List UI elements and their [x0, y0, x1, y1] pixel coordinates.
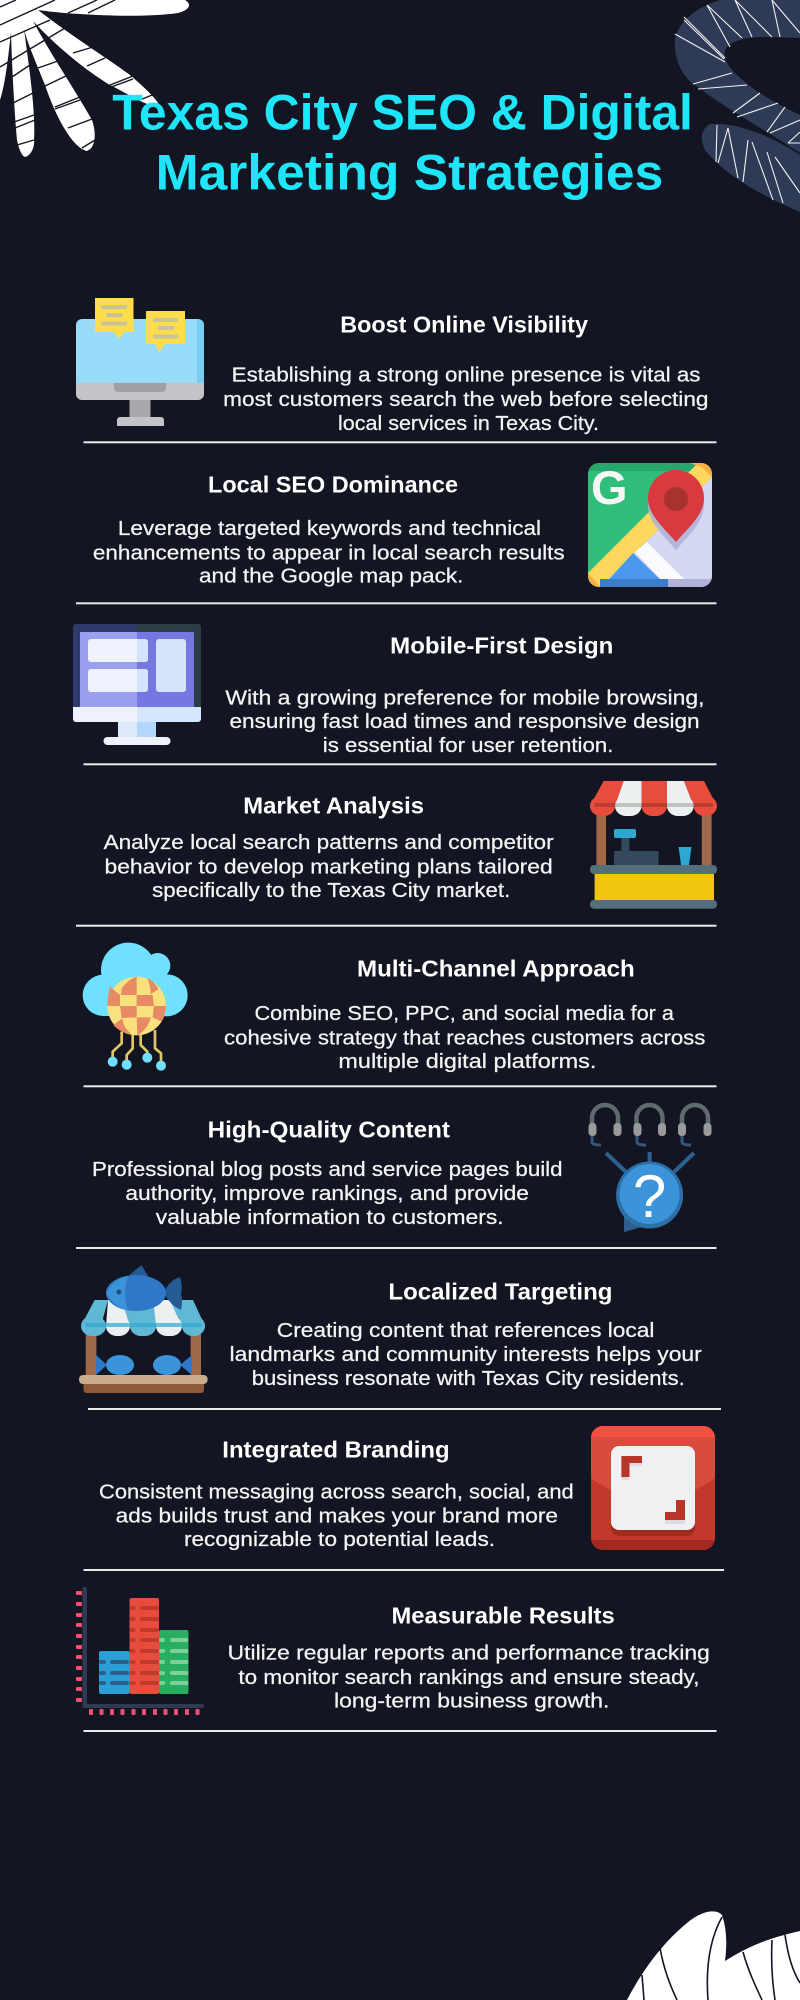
text block: Leverage targeted keywords and technical	[118, 518, 541, 540]
heading: Local SEO Dominance	[208, 471, 458, 497]
icon: headsets and question bubble	[588, 1105, 712, 1232]
text block: business resonate with Texas City residents.	[252, 1368, 685, 1390]
text block	[92, 1159, 562, 1229]
title: Texas City SEO & Digital	[112, 84, 693, 140]
text block: local services in Texas City.	[338, 413, 599, 435]
text block: valuable information to customers.	[156, 1207, 504, 1229]
text block: is essential for user retention.	[323, 735, 613, 757]
title: Marketing Strategies	[156, 144, 663, 200]
heading: Measurable Results	[392, 1603, 615, 1629]
text block: specifically to the Texas City market.	[152, 880, 510, 902]
panel: High-Quality Content	[92, 1105, 712, 1232]
heading: Boost Online Visibility	[340, 311, 588, 337]
heading: High-Quality Content	[208, 1116, 450, 1142]
decoration: navy leaf top right	[675, 0, 800, 212]
text block: multiple digital platforms.	[338, 1051, 596, 1073]
text block	[228, 1643, 710, 1713]
text block: Establishing a strong online presence is vital as	[232, 365, 700, 387]
text block	[93, 518, 565, 588]
text block: Consistent messaging across search, social, and	[99, 1481, 574, 1503]
icon: cloud and globe network	[83, 943, 188, 1071]
text block: to monitor search rankings and ensure steady,	[238, 1667, 700, 1689]
decoration: white leaf bottom right	[627, 1911, 800, 2000]
panel: Mobile-First Design	[73, 624, 704, 757]
text block	[230, 1320, 702, 1390]
panel: Multi-Channel Approach	[83, 943, 705, 1073]
text block: most customers search the web before selecting	[223, 389, 708, 411]
icon: market stall with cash register	[590, 781, 717, 909]
panel: Boost Online Visibility	[76, 298, 708, 435]
icon: red brand tile	[591, 1426, 715, 1550]
icon: purple desktop monitor	[73, 624, 201, 745]
text block: enhancements to appear in local search results	[93, 542, 565, 564]
panel: Integrated Branding	[100, 1426, 715, 1550]
text block: Utilize regular reports and performance tracking	[228, 1643, 710, 1665]
panel: Market Analysis	[104, 781, 717, 909]
heading: Integrated Branding	[222, 1436, 450, 1462]
heading: Localized Targeting	[388, 1279, 612, 1305]
text block: ads builds trust and makes your brand more	[116, 1505, 558, 1527]
text block: behavior to develop marketing plans tailored	[104, 856, 553, 878]
icon: bar chart	[76, 1587, 204, 1715]
title	[112, 84, 693, 200]
heading: Mobile-First Design	[390, 633, 613, 659]
text block: Combine SEO, PPC, and social media for a	[254, 1003, 675, 1025]
text block: Professional blog posts and service pages build	[92, 1159, 562, 1181]
text block: recognizable to potential leads.	[184, 1529, 495, 1551]
decoration: white leaf top left	[0, 0, 189, 157]
text block: and the Google map pack.	[199, 566, 463, 588]
icon: fish market stall	[79, 1265, 208, 1393]
text block: Creating content that references local	[277, 1320, 654, 1342]
icon: Google map pin: G	[591, 461, 628, 514]
text block	[223, 365, 708, 435]
text block: Analyze local search patterns and competitor	[104, 832, 554, 854]
text block: long-term business growth.	[334, 1691, 609, 1713]
heading: Multi-Channel Approach	[357, 955, 635, 981]
heading: Market Analysis	[243, 792, 424, 818]
text block: authority, improve rankings, and provide	[125, 1183, 529, 1205]
text block	[99, 1481, 574, 1551]
icon: Google map pin	[588, 461, 712, 587]
text block: ensuring fast load times and responsive design	[230, 711, 700, 733]
text block	[104, 832, 554, 902]
text block: cohesive strategy that reaches customers across	[224, 1027, 705, 1049]
text block: With a growing preference for mobile browsing,	[225, 687, 704, 709]
panel: Localized Targeting	[79, 1265, 702, 1393]
text block	[225, 687, 704, 757]
icon: desktop monitor with chat bubbles	[76, 298, 204, 426]
panel: Local SEO Dominance	[93, 461, 712, 588]
icon: headsets and question bubble: ?	[633, 1163, 666, 1230]
panel: Measurable Results	[76, 1587, 710, 1715]
text block	[224, 1003, 705, 1073]
text block: landmarks and community interests helps your	[230, 1344, 702, 1366]
